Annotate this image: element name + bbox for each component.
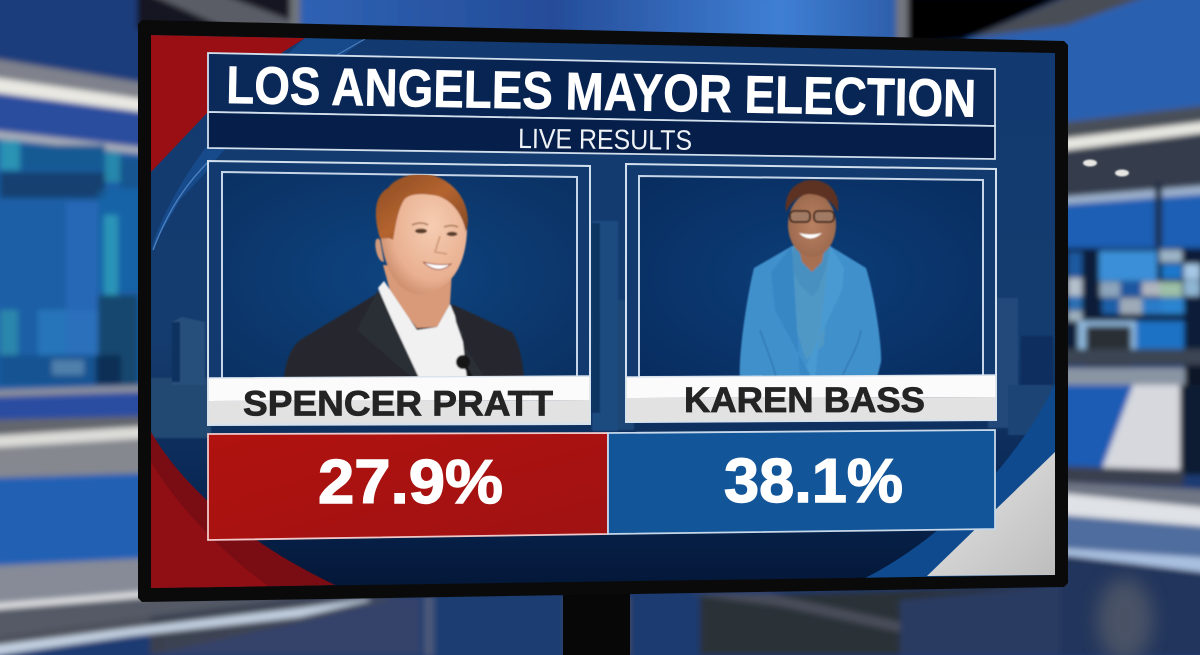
- title band: [208, 53, 995, 126]
- title panel: [208, 53, 995, 159]
- bottom-right blue swoosh: [865, 383, 1055, 578]
- Bass percentage: 38.1%: [724, 447, 903, 516]
- studio ceiling lamps: [1083, 160, 1129, 176]
- card frame: [208, 161, 590, 425]
- photo backdrop: [639, 176, 983, 377]
- portrait: man in dark blazer: [284, 174, 524, 380]
- swoosh highlight line: [153, 160, 210, 250]
- monitor frame: [138, 20, 1068, 602]
- bottom-left red swoosh: [151, 432, 335, 590]
- candidate card: Spencer Pratt: [208, 161, 590, 425]
- blue segment: Bass: [608, 430, 995, 534]
- screen background: [145, 30, 1065, 595]
- candidate card: Karen Bass: [626, 164, 996, 422]
- monitor screen: [145, 30, 1065, 595]
- left studio wall: [0, 0, 420, 650]
- title: LOS ANGELES MAYOR ELECTION: [226, 56, 977, 129]
- skyline: [151, 221, 1053, 438]
- portrait: woman in blue jacket: [740, 180, 881, 378]
- subtitle band: [208, 112, 995, 159]
- red top-left wedge: [151, 35, 305, 172]
- nameplate: [626, 375, 996, 422]
- card frame: [626, 164, 996, 422]
- top wall: [137, 0, 302, 30]
- Pratt percentage: 27.9%: [318, 448, 503, 517]
- floor reflection: [1097, 578, 1153, 655]
- results bar: [208, 430, 995, 540]
- monitor stand: [563, 590, 630, 655]
- subtitle: LIVE RESULTS: [518, 123, 692, 156]
- floor: [150, 597, 1200, 655]
- bottom-right white corner: [927, 452, 1055, 576]
- top-left blue swoosh: [151, 38, 363, 250]
- right studio wall: [965, 0, 1200, 655]
- red segment: Pratt: [208, 433, 608, 540]
- candidate name: KAREN BASS: [684, 381, 925, 420]
- candidate name: SPENCER PRATT: [243, 384, 553, 424]
- bottom-left red inner swoosh: [151, 462, 268, 590]
- photo backdrop: [222, 172, 577, 379]
- nameplate: [208, 376, 590, 424]
